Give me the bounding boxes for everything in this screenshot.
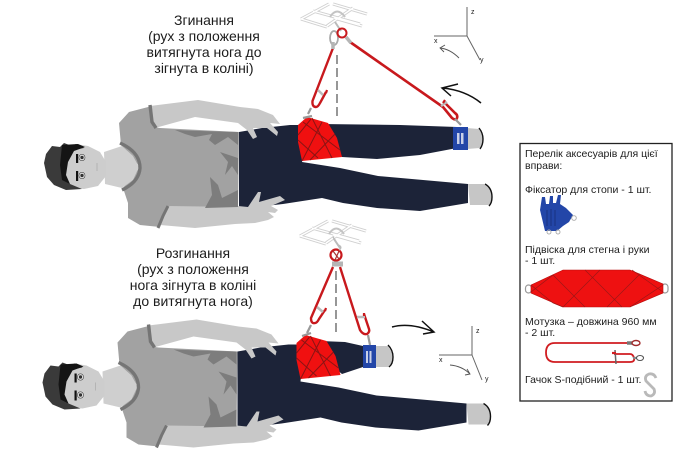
dashed vertical line	[335, 271, 337, 333]
item label: thigh and arm sling: Підвіска для стегна і руки	[525, 244, 650, 256]
arrow: flexion direction	[442, 84, 481, 103]
raised straight leg	[320, 124, 457, 159]
item label: foot fixator: Фіксатор для стопи - 1 шт.	[525, 184, 651, 196]
figure: person with straight leg	[44, 100, 492, 228]
title: flexion	[147, 12, 262, 76]
arrow: extension direction	[392, 321, 434, 334]
thigh sling	[298, 117, 342, 161]
panel: accessories list	[520, 144, 672, 401]
dashed vertical line	[336, 55, 338, 116]
panel heading: Перелік аксесуарів для цієї	[525, 148, 658, 160]
title: extension: Розгинання	[156, 245, 230, 261]
ceiling frame	[300, 221, 366, 248]
title: extension: (рух з положення	[137, 261, 249, 277]
foot fixator	[363, 345, 376, 368]
axes: extension: y	[485, 376, 489, 383]
panel heading: вправи:	[525, 160, 562, 172]
axes: flexion: x	[434, 38, 438, 45]
axes: extension: x	[439, 357, 443, 364]
title: extension: нога зігнута в коліні	[130, 277, 256, 293]
axes: flexion	[434, 7, 484, 64]
title: extension: до витягнута нога)	[133, 293, 253, 309]
item label: thigh and arm sling: - 1 шт.	[525, 255, 555, 267]
axes: extension	[439, 326, 489, 383]
title: flexion: витягнута нога до	[147, 44, 262, 60]
foot fixator	[453, 127, 468, 150]
icon: S-hook	[645, 374, 656, 396]
axes: flexion: y	[480, 57, 484, 64]
foot	[467, 128, 483, 149]
ropes: extension	[302, 237, 370, 345]
ropes: flexion	[303, 28, 461, 125]
thigh sling	[296, 335, 340, 379]
icon: foot fixator	[540, 195, 576, 234]
icon: rope	[546, 340, 644, 364]
bent leg	[320, 341, 363, 374]
title: flexion: (рух з положення	[148, 28, 260, 44]
item label: S-hook: Гачок S-подібний - 1 шт.	[525, 374, 641, 386]
title: flexion: Згинання	[174, 12, 234, 28]
icon: sling	[526, 270, 668, 307]
figure: person with bent leg	[42, 320, 490, 448]
axes: flexion: z	[471, 9, 475, 16]
title: extension	[130, 245, 256, 309]
ceiling frame	[301, 4, 367, 31]
item label: rope: Мотузка – довжина 960 мм	[525, 316, 657, 328]
item label: rope: - 2 шт.	[525, 327, 555, 339]
title: flexion: зігнута в коліні)	[154, 60, 254, 76]
foot	[376, 345, 393, 367]
axes: extension: z	[476, 328, 480, 335]
